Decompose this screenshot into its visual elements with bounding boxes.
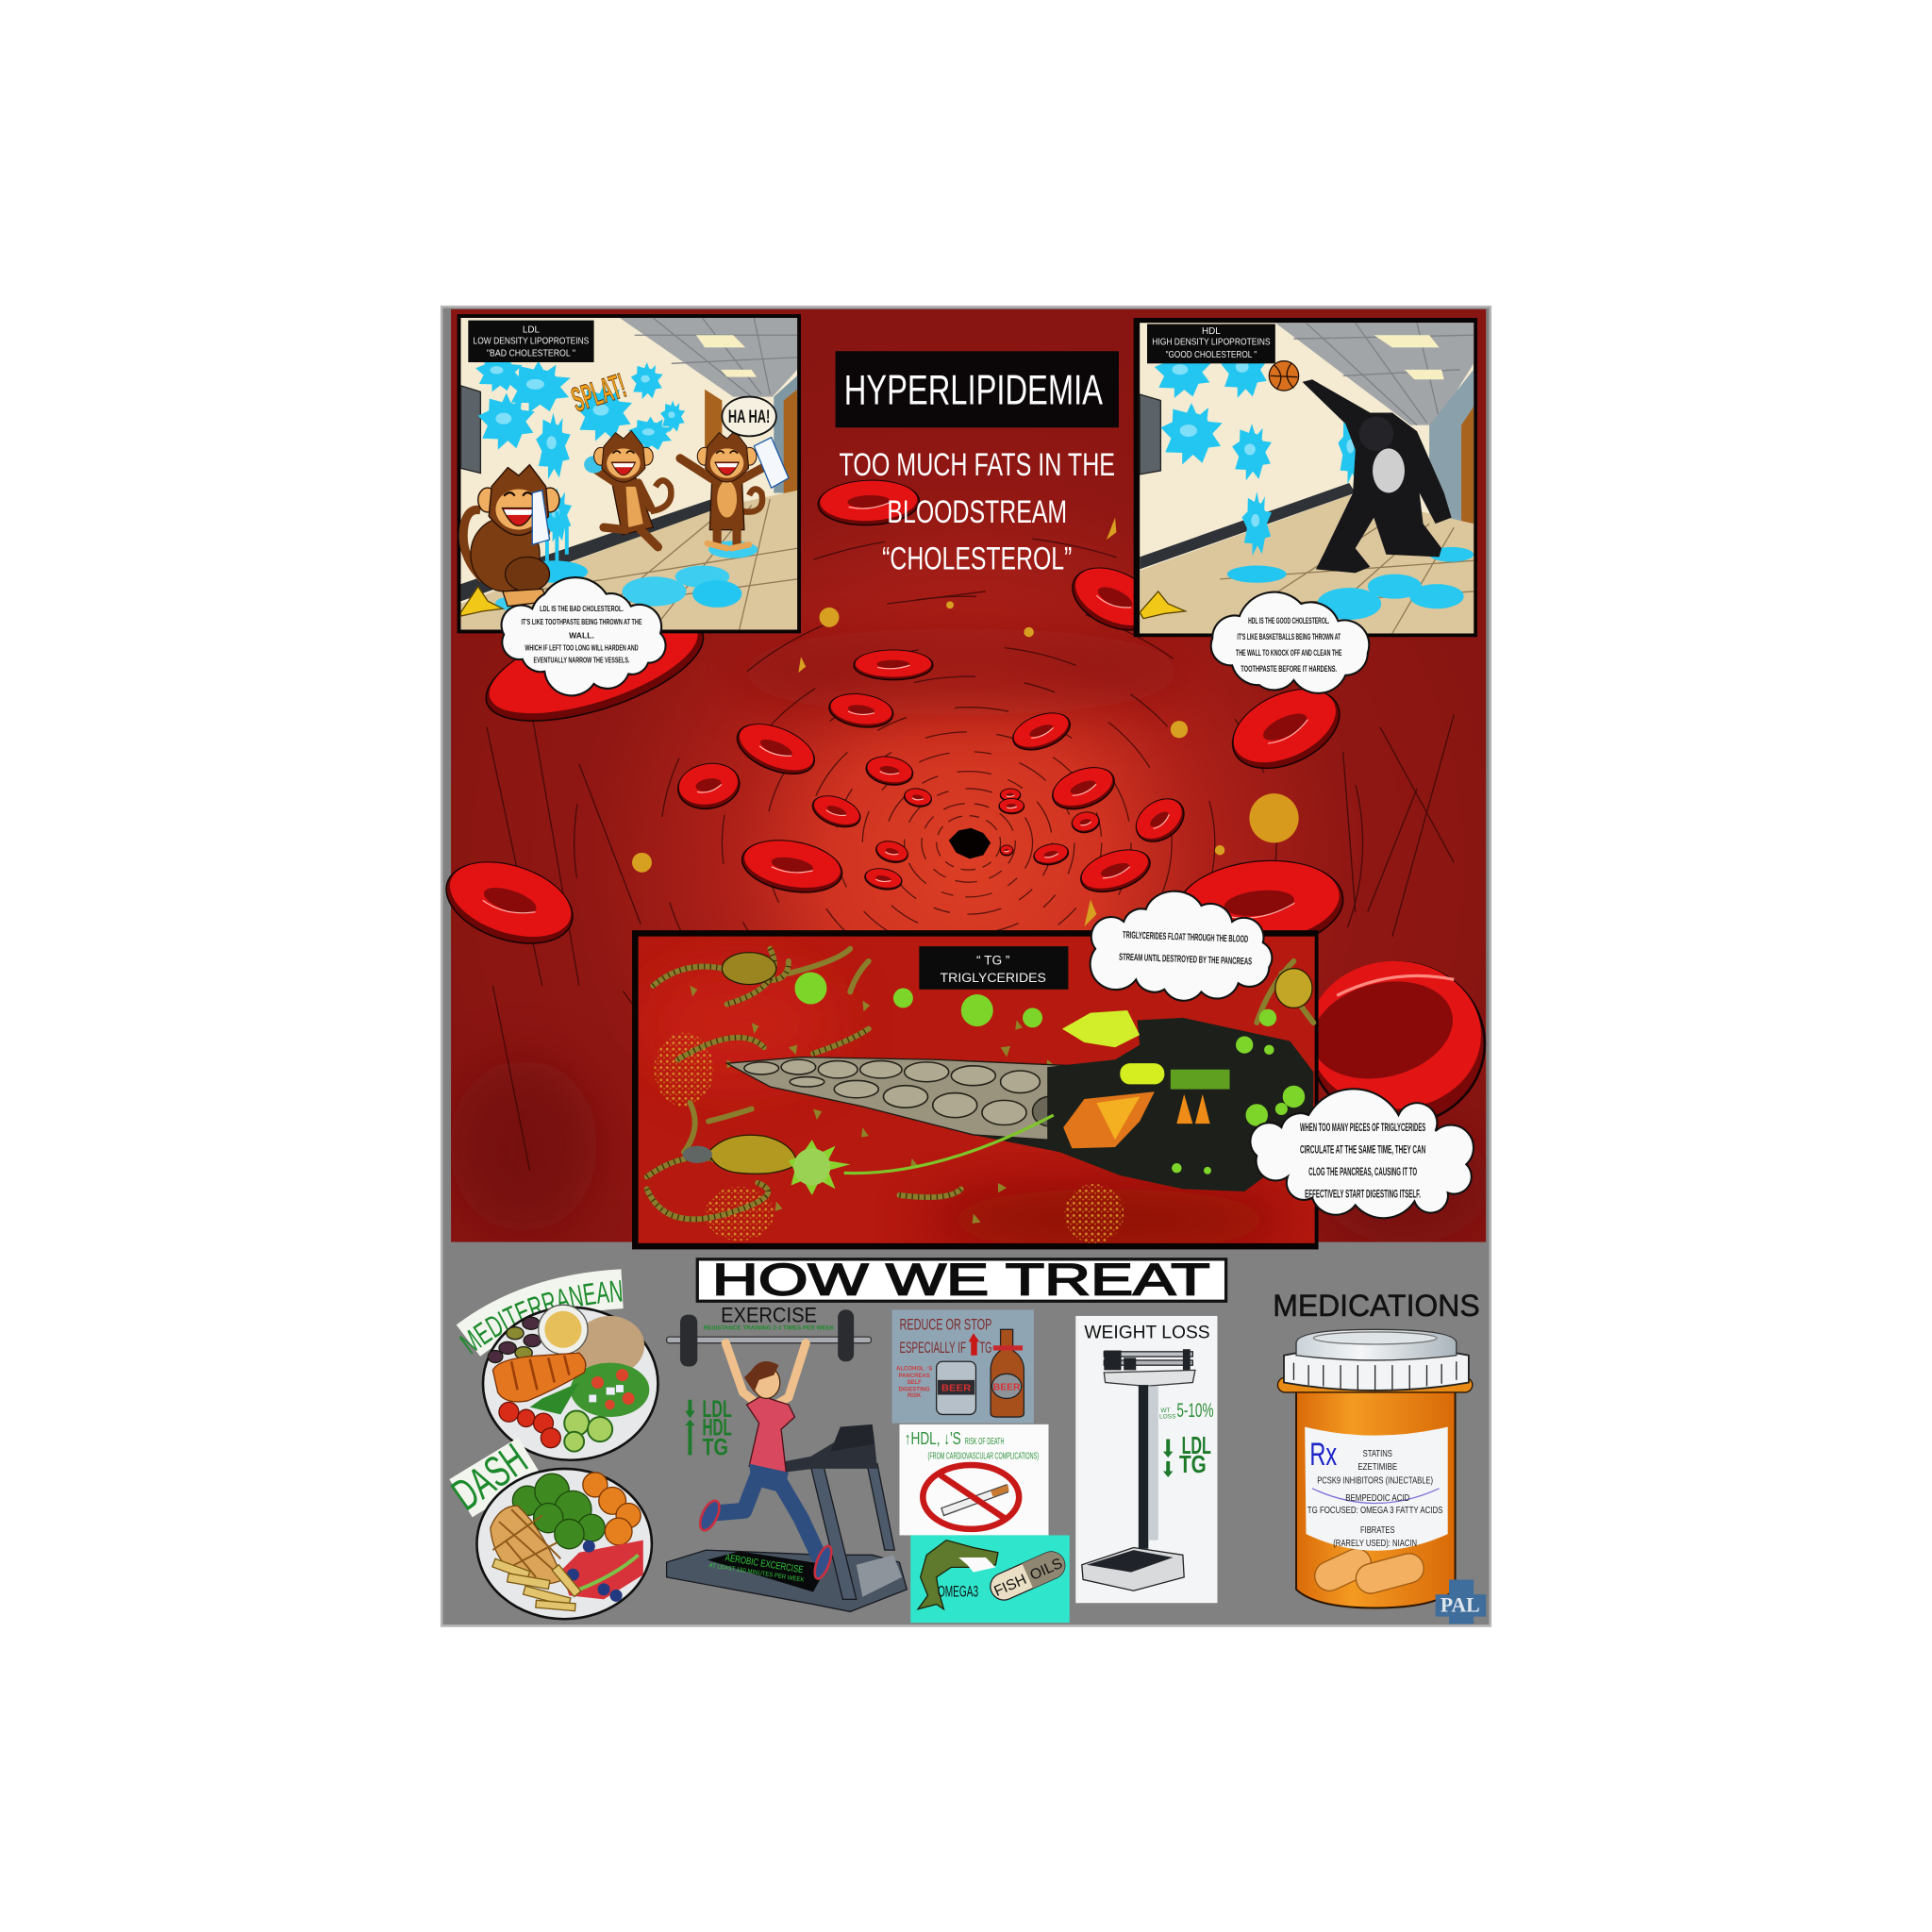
exercise lipid effects: TG	[702, 1436, 728, 1461]
thought cloud: HDL: IT'S LIKE BASKETBALLS BEING THROWN AT	[1237, 632, 1341, 641]
balance scale	[1082, 1349, 1195, 1591]
lipid effects: TG	[1179, 1450, 1207, 1478]
panel: LDL monkeys comic	[458, 314, 801, 633]
toothpaste splats	[475, 353, 758, 610]
prescription label: EZETIMIBE	[1357, 1462, 1398, 1473]
panel: stop smoking	[899, 1424, 1049, 1535]
panel: reduce alcohol	[892, 1309, 1034, 1424]
weight loss target	[1159, 1400, 1214, 1422]
panel: reduce alcohol: ALCOHOL ↑S	[896, 1366, 932, 1372]
salmon	[492, 1353, 586, 1402]
aerobic exercise label: AEROBIC EXCERCISE	[724, 1553, 804, 1575]
thought cloud: triglycerides float: STREAM UNTIL DESTROYED BY THE PANCREAS	[1119, 953, 1252, 968]
olives	[488, 1317, 541, 1363]
Mediterranean plate	[483, 1305, 658, 1460]
prescription label: TG FOCUSED: OMEGA 3 FATTY ACIDS	[1307, 1506, 1443, 1516]
panel: LDL monkeys comic: SPLAT!	[567, 366, 630, 420]
exercise lipid effects: HDL	[702, 1416, 732, 1441]
panel: reduce alcohol: SELF	[907, 1380, 922, 1386]
panel: reduce alcohol: PANCREAS	[899, 1374, 930, 1379]
cucumbers	[564, 1411, 612, 1452]
prescription label: (RARELY USED): NIACIN	[1333, 1539, 1417, 1549]
poster border	[441, 307, 1491, 1625]
diet: DASH banner	[442, 1433, 536, 1520]
floating debris	[690, 986, 1055, 1224]
no smoking icon	[923, 1465, 1019, 1529]
thought cloud: too many triglycerides: WHEN TOO MANY PIECES OF TRIGLYCERIDES	[1300, 1122, 1425, 1134]
lipid effects: LDL	[1182, 1431, 1211, 1459]
fat speckle clusters	[655, 1033, 1124, 1243]
bottle lip	[1277, 1377, 1473, 1392]
monkey left with toothpaste	[463, 465, 559, 607]
bottle body	[1296, 1386, 1456, 1607]
thought cloud: HDL: THE WALL TO KNOCK OFF AND CLEAN THE	[1236, 648, 1341, 658]
broccoli	[512, 1474, 605, 1549]
lipid effects	[1163, 1431, 1211, 1478]
glowing green orbs	[794, 973, 1305, 1174]
thought cloud: HDL	[1211, 592, 1369, 693]
omega3 caption: OMEGA3	[938, 1583, 978, 1601]
yellow plasma flame	[1062, 1010, 1140, 1047]
prescription bottle	[1277, 1329, 1473, 1607]
HDL label: HDL	[1202, 326, 1221, 337]
monkey middle	[584, 431, 671, 547]
treadmill	[667, 1424, 907, 1611]
TG label	[919, 946, 1068, 990]
heading: medications: MEDICATIONS	[1273, 1288, 1480, 1323]
sweet potato	[583, 1473, 641, 1545]
LDL label: LOW DENSITY LIPOPROTEINS	[474, 336, 590, 346]
monkey right	[680, 431, 789, 548]
hummus bowl	[539, 1305, 588, 1354]
panel: omega 3	[910, 1535, 1070, 1623]
thought cloud: too many triglycerides: CLOG THE PANCREAS, CAUSING IT TO	[1308, 1166, 1417, 1178]
ship fire	[1063, 1091, 1210, 1148]
floor	[460, 491, 797, 629]
thought cloud: LDL: IT'S LIKE TOOTHPASTE BEING THROWN AT THE	[521, 617, 642, 626]
yellow fat particles	[632, 518, 1299, 926]
aerobic exercise label	[708, 1551, 807, 1584]
artery lumen	[949, 828, 991, 858]
heading: how we treat	[697, 1255, 1226, 1305]
panel: stop smoking: (FROM CARDIOVASCULAR COMPLICATIONS)	[928, 1451, 1039, 1461]
PAL logo	[1436, 1579, 1486, 1624]
panel: weight loss: WEIGHT LOSS	[1084, 1322, 1210, 1342]
prescription label	[1305, 1426, 1448, 1551]
hallway ceiling	[1275, 323, 1474, 425]
PAL logo: PAL	[1441, 1592, 1480, 1616]
thought cloud: too many triglycerides	[1250, 1089, 1474, 1218]
panel: stop smoking: RISK OF DEATH	[965, 1437, 1004, 1447]
banana peel	[1140, 591, 1185, 619]
thought cloud: LDL: WALL.	[569, 631, 594, 641]
red up arrow	[969, 1333, 979, 1356]
LDL label: "BAD CHOLESTEROL "	[487, 348, 575, 358]
diet: DASH banner: DASH	[442, 1433, 536, 1520]
prescription label: BEMPEDOIC ACID	[1345, 1493, 1409, 1504]
HA HA speech bubble	[722, 397, 776, 436]
exercise lipid effects: LDL	[702, 1397, 732, 1423]
prescription label: PCSK9 INHIBITORS (INJECTABLE)	[1317, 1476, 1433, 1487]
fish oil capsule	[986, 1547, 1069, 1605]
beer bottle: BEER	[993, 1382, 1021, 1392]
panel: triglycerides battle	[632, 930, 1319, 1251]
subtitle	[839, 447, 1115, 576]
beer bottle	[991, 1329, 1024, 1417]
heading: how we treat: HOW WE TREAT	[712, 1255, 1210, 1305]
exercise lipid effects	[685, 1397, 732, 1461]
HDL label: "GOOD CHOLESTEROL "	[1166, 350, 1257, 360]
gorilla	[1303, 379, 1452, 573]
large red blood cell right	[1302, 961, 1485, 1124]
thought cloud: HDL: HDL IS THE GOOD CHOLESTEROL.	[1248, 616, 1329, 625]
prescription label: FIBRATES	[1360, 1525, 1395, 1536]
exercising woman	[696, 1343, 835, 1581]
salad	[571, 1363, 649, 1417]
panel: weight loss	[1075, 1316, 1217, 1603]
subtitle: BLOODSTREAM	[887, 494, 1067, 530]
heading: exercise: RESISTANCE TRAINING 2-3 TIMES PER WEEK	[704, 1324, 835, 1331]
panel: reduce alcohol: TG	[979, 1339, 991, 1357]
panel: HDL gorilla comic	[1134, 318, 1477, 637]
diet: Mediterranean banner: MEDITERRANEAN	[458, 1280, 623, 1355]
panel: blood vessel background	[436, 309, 1491, 1244]
thought cloud: HDL: TOOTHPASTE BEFORE IT HARDENS.	[1241, 664, 1337, 674]
heading: exercise: EXERCISE	[721, 1303, 817, 1326]
thought cloud: too many triglycerides: EFFECTIVELY START DIGESTING ITSELF.	[1305, 1189, 1421, 1201]
grilled chicken	[491, 1506, 563, 1584]
LDL label: LDL	[523, 325, 541, 336]
banana peel	[460, 587, 503, 616]
prescription label: STATINS	[1363, 1449, 1392, 1459]
weight loss target: LOSS	[1159, 1413, 1176, 1420]
alien top right	[1275, 969, 1312, 1008]
floor	[1140, 495, 1474, 633]
picture frame on wall	[1140, 394, 1160, 475]
HDL label	[1147, 325, 1275, 363]
weight loss target: WT	[1160, 1407, 1171, 1414]
thought cloud: too many triglycerides: CIRCULATE AT THE SAME TIME, THEY CAN	[1300, 1144, 1425, 1157]
aerobic exercise label: AT LEAST 150 MINUTES PER WEEK	[708, 1562, 805, 1584]
subtitle: “CHOLESTEROL”	[882, 541, 1072, 576]
HDL label: HIGH DENSITY LIPOPROTEINS	[1152, 338, 1271, 348]
TG ship engine section	[974, 1018, 1313, 1191]
bottle cap	[1284, 1329, 1469, 1391]
panel: reduce alcohol: REDUCE OR STOP	[899, 1315, 991, 1333]
capsules	[1310, 1544, 1427, 1597]
TG label: TRIGLYCERIDES	[941, 971, 1046, 985]
tomatoes	[499, 1402, 560, 1448]
panel: reduce alcohol: RISK	[908, 1393, 922, 1399]
heading: exercise	[704, 1303, 835, 1331]
thought cloud: LDL: LDL IS THE BAD CHOLESTEROL.	[540, 604, 624, 613]
prescription label: Rx	[1309, 1437, 1337, 1473]
panel: reduce alcohol: DIGESTING	[899, 1388, 930, 1393]
rice	[575, 1316, 644, 1375]
penne pasta	[492, 1558, 581, 1611]
alien top left	[722, 953, 776, 985]
beer can	[937, 1361, 975, 1414]
TG ship hull	[727, 1058, 1084, 1140]
thought cloud: LDL: EVENTUALLY NARROW THE VESSELS.	[534, 656, 629, 665]
beer can: BEER	[941, 1384, 972, 1394]
hallway ceiling	[620, 318, 797, 397]
panel: stop smoking: ↑HDL, ↓'S	[905, 1428, 961, 1448]
barbell	[667, 1309, 871, 1366]
fish oil capsule: OILS	[1027, 1556, 1065, 1584]
toothpaste splats	[1155, 341, 1474, 620]
title: HYPERLIPIDEMIA	[844, 367, 1103, 413]
DASH plate	[476, 1469, 652, 1619]
weight loss target: 5-10%	[1176, 1400, 1214, 1422]
fish	[918, 1541, 998, 1609]
panel: reduce alcohol: ESPECIALLY IF	[899, 1339, 966, 1357]
thought cloud: triglycerides float	[1091, 891, 1272, 1001]
alien bottom left	[683, 1115, 1054, 1195]
TG label: “ TG ”	[976, 954, 1010, 968]
title	[836, 351, 1119, 427]
green energy burst	[789, 1140, 850, 1195]
berries and watermelon	[560, 1541, 643, 1599]
thought cloud: LDL	[502, 577, 666, 695]
subtitle: TOO MUCH FATS IN THE	[839, 447, 1115, 483]
thought cloud: LDL: WHICH IF LEFT TOO LONG WILL HARDEN AND	[525, 643, 639, 653]
poster canvas	[440, 306, 1492, 1627]
basketball	[1269, 361, 1299, 391]
LDL label	[468, 321, 594, 362]
fish oil capsule: FISH	[991, 1572, 1029, 1600]
HA HA speech bubble: HA HA!	[728, 407, 770, 427]
thought cloud: triglycerides float: TRIGLYCERIDES FLOAT THROUGH THE BLOOD	[1123, 930, 1249, 945]
picture frame on wall	[460, 386, 480, 474]
degraded worm debris	[647, 949, 1313, 1219]
red blood cells	[436, 479, 1352, 958]
